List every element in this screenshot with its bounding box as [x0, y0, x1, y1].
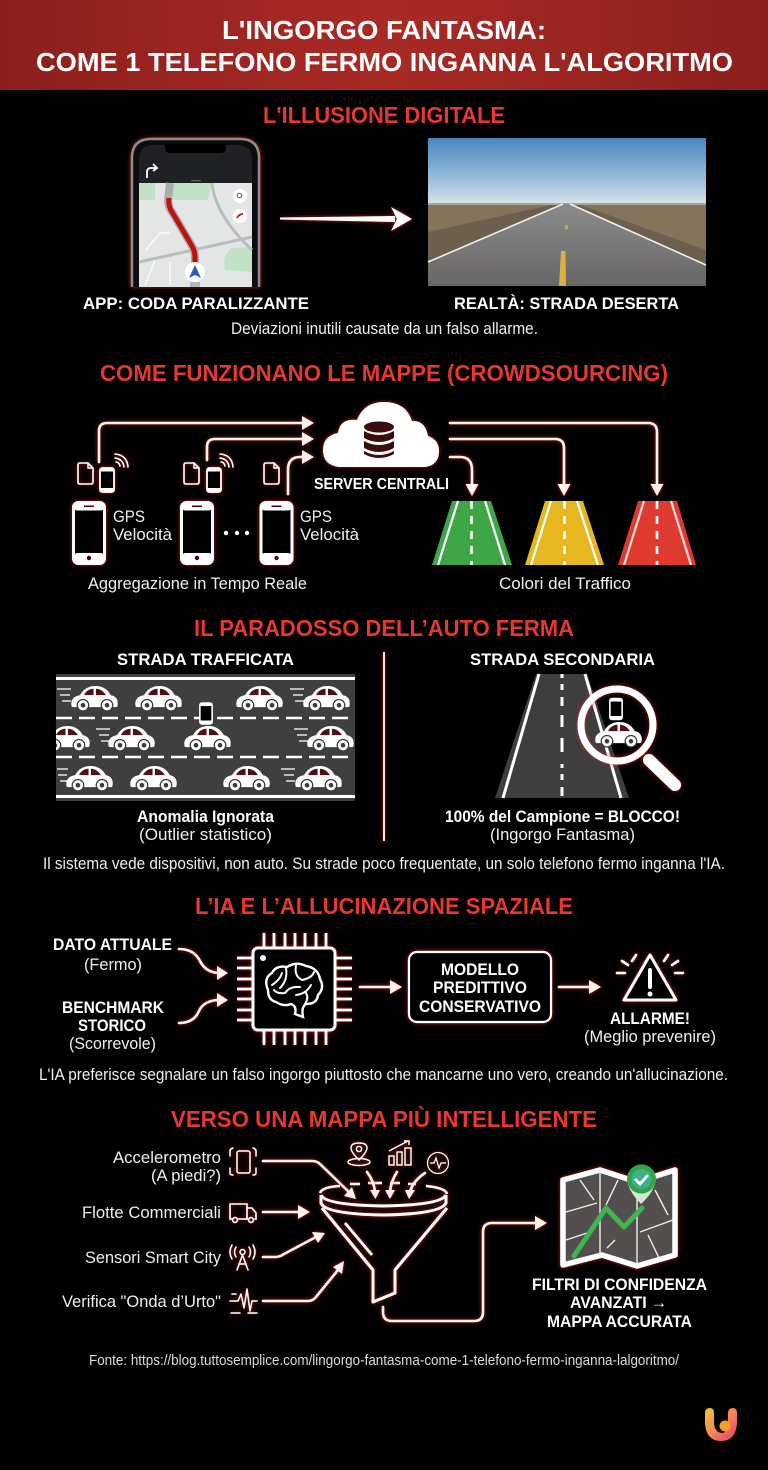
logo [705, 1408, 737, 1441]
label: blocco [445, 807, 680, 844]
panel: l'illusione digitale [83, 102, 706, 338]
header band with title: L'INGORGO FANTASMA: [222, 15, 546, 45]
icon: smart city tower [230, 1245, 255, 1270]
arrow: chip to model [360, 980, 402, 994]
label: sensori: Sensori Smart City [85, 1248, 221, 1267]
label: dato attuale: DATO ATTUALE [53, 935, 172, 954]
header band with title: COME 1 TELEFONO FERMO INGANNA L'ALGORITMO [36, 47, 733, 77]
label: app: APP: CODA PARALIZZANTE [83, 294, 309, 313]
heading: ia: L’IA E L’ALLUCINAZIONE SPAZIALE [195, 893, 573, 919]
panel: il paradosso dell'auto ferma [43, 615, 725, 873]
icon: user phone group 2 [182, 454, 233, 564]
label: benchmark storico [62, 998, 165, 1053]
arrows: server to roads [450, 423, 664, 496]
label: accelerometro [113, 1148, 221, 1185]
arrows: phones to server [99, 416, 314, 494]
label: strada trafficata: STRADA TRAFFICATA [117, 650, 294, 669]
icon: truck [230, 1204, 256, 1222]
label: filtri: AVANZATI → [570, 1293, 667, 1312]
icon: accelerometer phone [230, 1148, 256, 1175]
arrow: model to alarm [559, 980, 601, 994]
label: accelerometro: Accelerometro [113, 1148, 221, 1167]
label: filtri [532, 1275, 707, 1331]
icon: phone with navigation app [132, 139, 259, 287]
label: benchmark storico: BENCHMARK [62, 998, 165, 1017]
arrows: data into funnel [367, 1172, 425, 1199]
icon: warning triangle [617, 955, 683, 1000]
label: allarme [584, 1009, 716, 1046]
icon: ellipsis dots [224, 531, 249, 535]
label: blocco: (Ingorgo Fantasma) [490, 825, 635, 844]
arrow: funnel to map [383, 1216, 547, 1321]
source line: Fonte: https://blog.tuttosemplice.com/lingorgo-fantasma-come-1-telefono-fermo-inganna-lalgoritmo/ [89, 1353, 680, 1369]
label: allarme: ALLARME! [610, 1009, 690, 1028]
label: gps velocità left: Velocità [113, 525, 173, 544]
heading: crowdsourcing: COME FUNZIONANO LE MAPPE (CROWDSOURCING) [100, 360, 668, 386]
label: aggregazione: Aggregazione in Tempo Reale [88, 574, 307, 593]
icon: accurate map [563, 1164, 675, 1266]
icon: bar chart [389, 1141, 411, 1165]
label: filtri: MAPPA ACCURATA [547, 1312, 692, 1331]
label: verifica: Verifica "Onda d’Urto" [62, 1292, 221, 1311]
label: strada secondaria: STRADA SECONDARIA [470, 650, 655, 669]
label: dato attuale: (Fermo) [84, 955, 142, 974]
label: filtri: FILTRI DI CONFIDENZA [532, 1275, 707, 1294]
divider [383, 652, 385, 841]
icon: user phone group 3 [261, 463, 292, 564]
label: allarme: (Meglio prevenire) [584, 1027, 716, 1046]
label: anomalia [137, 807, 274, 844]
icon: shock wave pulse [230, 1289, 257, 1313]
icon: green road [432, 501, 512, 565]
icon: yellow road [525, 501, 604, 565]
icon: user phone group 1 [74, 454, 128, 564]
arrows: inputs to chip [179, 949, 228, 1023]
panel: verso una mappa più intelligente [62, 1105, 707, 1331]
label: gps velocità right [300, 507, 360, 544]
icon: red road [618, 501, 696, 565]
label: gps velocità right: Velocità [300, 525, 360, 544]
label: blocco: 100% del Campione = BLOCCO! [445, 807, 680, 826]
label: reality: REALTÀ: STRADA DESERTA [454, 294, 679, 313]
arrow: app to reality [280, 207, 412, 231]
label: accelerometro: (A piedi?) [151, 1166, 221, 1185]
label: dato attuale [53, 935, 172, 974]
caption: Deviazioni inutili causate da un falso allarme. [231, 319, 538, 338]
illustration: busy road with cars [56, 674, 355, 801]
label: gps velocità left [113, 507, 173, 544]
label: gps velocità left: GPS [113, 507, 145, 526]
label: anomalia: Anomalia Ignorata [137, 807, 274, 826]
icon: cloud server [323, 402, 439, 467]
box: modello predittivo conservativo: CONSERVATIVO [419, 997, 541, 1016]
icon: funnel [320, 1183, 447, 1302]
label: gps velocità right: GPS [300, 507, 332, 526]
label: flotte: Flotte Commerciali [82, 1203, 221, 1222]
icon: location pin [348, 1143, 370, 1166]
box: modello predittivo conservativo: MODELLO [441, 960, 519, 979]
icon: ai chip with brain [237, 933, 352, 1045]
arrows: inputs to funnel [263, 1161, 356, 1301]
panel: ia e allucinazione [39, 893, 728, 1084]
label: benchmark storico: STORICO [78, 1016, 146, 1035]
illustration: secondary road with magnifier [495, 674, 675, 798]
box: modello predittivo conservativo: PREDITTIVO [433, 978, 527, 997]
heading: l'illusione digitale: L'ILLUSIONE DIGITALE [263, 102, 505, 128]
photo: empty road [428, 138, 706, 286]
label: colori del traffico: Colori del Traffico [499, 574, 631, 593]
heading: mappa: VERSO UNA MAPPA PIÙ INTELLIGENTE [171, 1105, 597, 1132]
label: server centrali: SERVER CENTRALI [314, 476, 449, 493]
heading: paradosso: IL PARADOSSO DELL’AUTO FERMA [194, 615, 574, 641]
panel: crowdsourcing [74, 360, 696, 593]
box: modello predittivo conservativo [409, 952, 551, 1022]
label: benchmark storico: (Scorrevole) [69, 1034, 156, 1053]
label: anomalia: (Outlier statistico) [139, 825, 272, 844]
header band with title [0, 0, 768, 90]
icon: gauge pulse [428, 1152, 448, 1174]
